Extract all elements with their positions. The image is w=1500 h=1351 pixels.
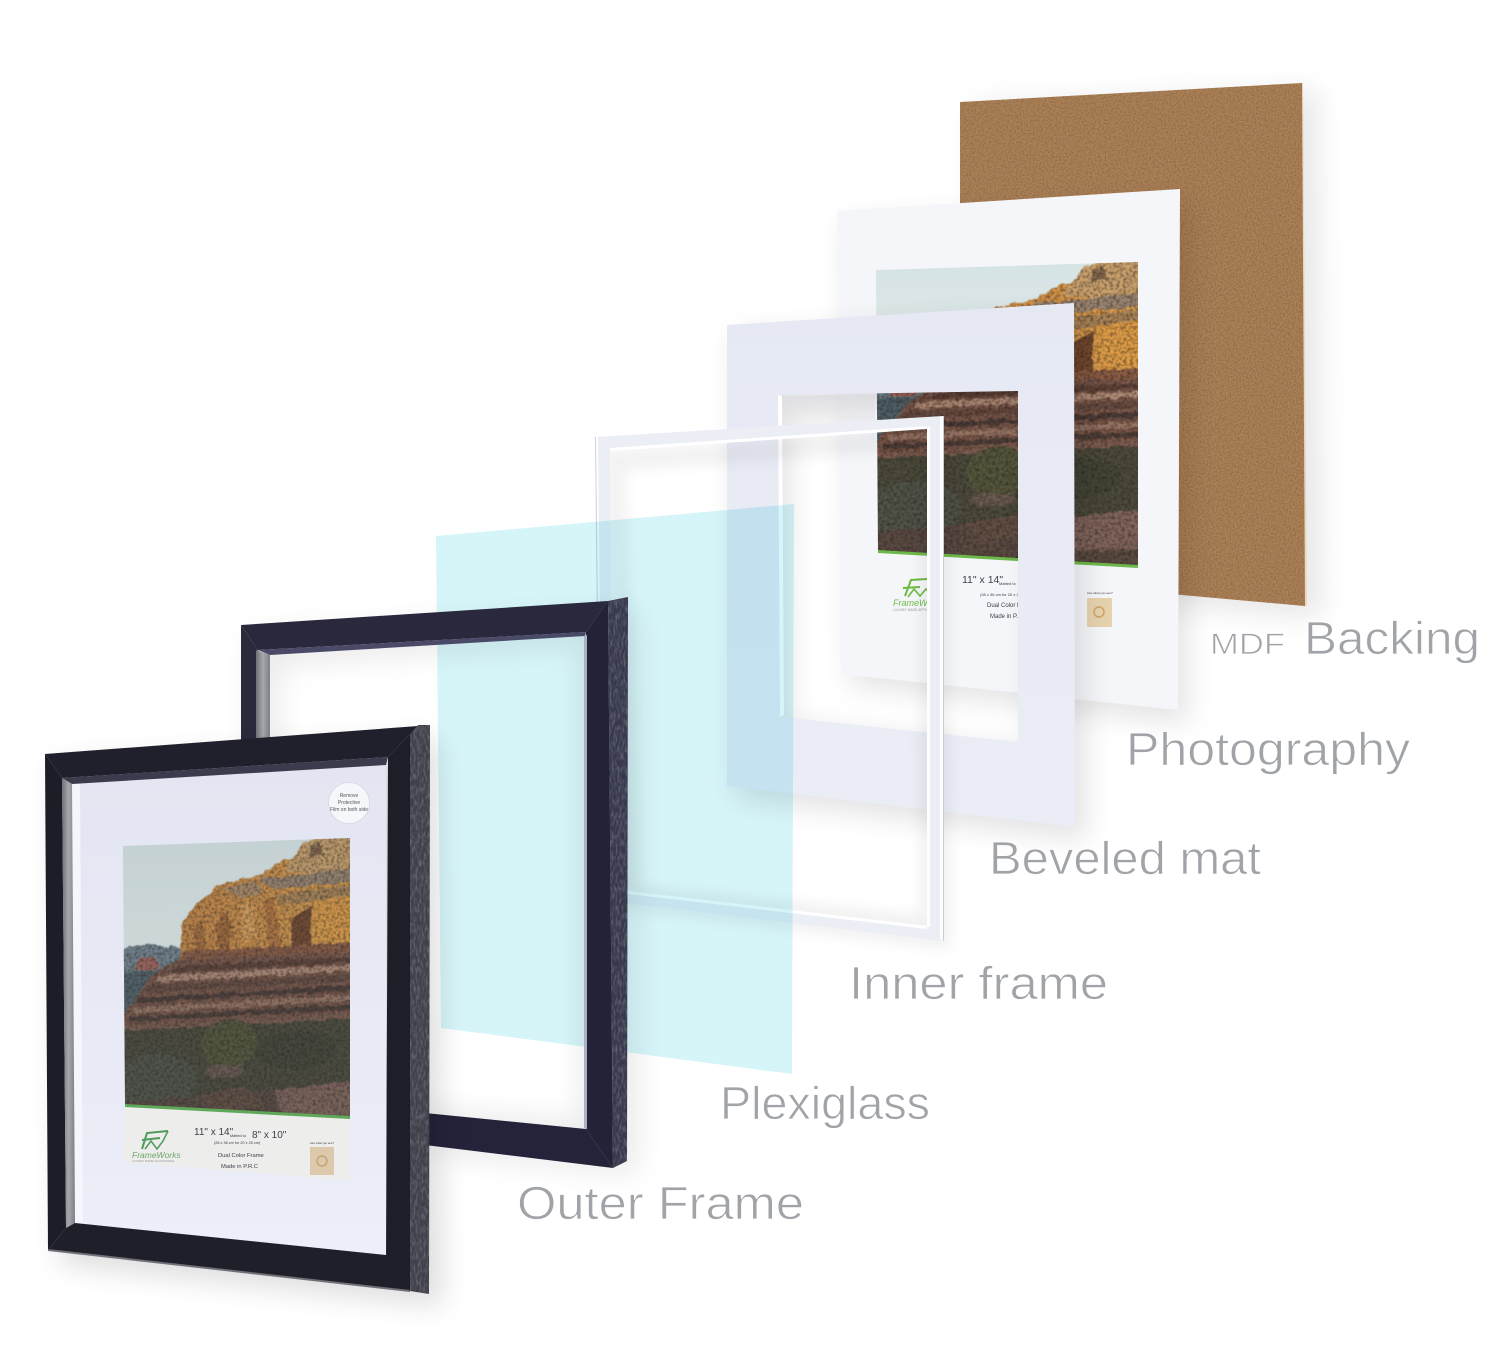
layer: MDF backing board <box>960 83 1322 618</box>
brand logo: FrameWorks <box>132 1150 181 1160</box>
brand logo <box>132 1131 181 1163</box>
sheet label text: (28 x 36 cm for 20 x 25 cm) <box>980 592 1029 597</box>
printed label: 8" x 10" <box>252 1130 287 1141</box>
frame top face <box>45 726 418 778</box>
frame bottom face <box>48 1223 410 1291</box>
layer: assembled front frame <box>45 725 442 1306</box>
layer: plexiglass sheet <box>436 504 794 1074</box>
layer: photography sheet <box>837 189 1190 724</box>
layer: inner frame <box>595 416 950 950</box>
label: Photography: Photography <box>1126 723 1410 775</box>
label: Outer Frame: Outer Frame <box>517 1177 804 1229</box>
matboard <box>72 765 386 1255</box>
sheet logo: LUXURY MADE AFFORDABLE <box>893 608 941 612</box>
sticker: Protective <box>338 800 360 806</box>
front photo <box>123 838 350 1116</box>
printed label: (28 x 36 cm for 20 x 25 cm) <box>214 1141 261 1145</box>
sticker: Remove <box>340 793 359 799</box>
sheet label text: Matted to <box>999 581 1016 586</box>
printed label: Made in P.R.C <box>221 1164 258 1170</box>
label: MDF Backing: MDF <box>1210 628 1285 661</box>
sticker <box>328 782 370 824</box>
printed label <box>123 1104 350 1181</box>
QR code: Like what you see? <box>310 1141 334 1145</box>
sheet label text: Dual Color Frame <box>987 603 1035 609</box>
bottom bar <box>425 1113 613 1168</box>
label: Plexiglass: Plexiglass <box>720 1077 930 1129</box>
label: Inner frame: Inner frame <box>849 957 1108 1009</box>
printed label: Dual Color Frame <box>218 1153 264 1159</box>
layer: outer frame back view <box>241 597 638 1175</box>
layer: beveled mat <box>727 303 1086 840</box>
QR code <box>310 1141 334 1175</box>
sheet label text: Made in P.R.C. <box>990 614 1030 620</box>
sheet QR code: Like what you see? <box>1087 591 1113 595</box>
sheet label text: 8" x 10" <box>1018 577 1054 589</box>
sheet photo <box>876 262 1138 565</box>
sheet QR code <box>1087 591 1113 627</box>
label: MDF Backing: Backing <box>1304 612 1480 664</box>
printed label: 11" x 14" <box>194 1127 234 1138</box>
sheet logo <box>893 579 945 612</box>
sheet label text: 11" x 14" <box>962 574 1003 586</box>
brand logo: LUXURY MADE AFFORDABLE <box>132 1159 174 1163</box>
label: MDF Backing <box>1210 612 1480 664</box>
frame right face <box>386 726 418 1291</box>
top bar <box>241 601 608 650</box>
sticker: Film on both side <box>330 807 368 813</box>
sheet label text <box>962 574 1054 620</box>
printed label: Matted to <box>230 1134 246 1138</box>
sheet logo: FrameWorks <box>893 598 945 608</box>
label: Beveled mat: Beveled mat <box>989 832 1261 884</box>
right bar <box>586 601 613 1168</box>
left bar <box>241 625 258 745</box>
frame left face <box>45 754 66 1250</box>
